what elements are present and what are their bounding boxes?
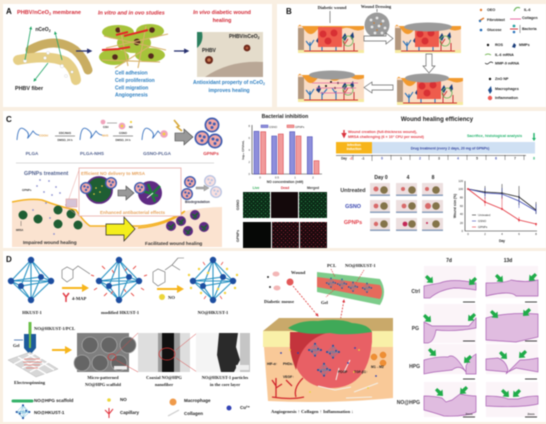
histology grid: 7d xyxy=(446,258,452,264)
line chart: wound size over days: 6 xyxy=(518,232,520,236)
photo: wound on skin: PHBV xyxy=(202,48,217,54)
wound photographs by day: 4 xyxy=(407,175,410,181)
bar chart: bacterial inhibition: 0 xyxy=(259,176,261,180)
fluorescence microscopy grid: GSNO xyxy=(236,200,240,210)
label HKUST-1: HKUST-1 xyxy=(22,310,42,315)
line chart: wound size over days: 80 xyxy=(460,196,463,200)
photo: wound on skin: 2 xyxy=(258,36,260,40)
line chart: wound size over days xyxy=(453,179,537,243)
tissue block with wound bed: PDGF xyxy=(338,370,347,374)
electrospinning setup: NO@HKUST-1/PCL xyxy=(34,326,75,331)
micrograph: core layer particles: NO@HKUST-1 particles xyxy=(202,375,248,380)
inset: NO delivery to MRSA xyxy=(66,168,181,216)
tissue block with wound bed: HIF-α↑ xyxy=(267,362,278,366)
panel letter D: D xyxy=(6,255,12,264)
histology grid: PG xyxy=(412,326,419,332)
illustration: PHBV fibers xyxy=(18,43,88,80)
coaxial fiber cutaway: NO@HKUST-1 xyxy=(345,263,376,268)
arrow 2 xyxy=(174,50,188,52)
legend: components: Fibroblast xyxy=(487,18,506,22)
histology grid: 13d xyxy=(504,258,512,264)
synthesis scheme: GSNO-PLGA xyxy=(143,151,172,156)
wound bed schematic: Facilitated wound healing xyxy=(145,241,202,246)
micrograph: micro-patterned scaffold: Micro-patterned xyxy=(87,375,119,380)
micrograph: coaxial nanofiber: Coaxial NO@HPG xyxy=(146,375,182,380)
tissue block with wound bed xyxy=(263,318,393,402)
panel letter A: A xyxy=(6,7,12,16)
coaxial fiber cutaway: PCL xyxy=(327,263,336,268)
label nCeO2: 2 xyxy=(49,29,51,33)
coaxial fiber cutaway xyxy=(317,263,384,322)
wound photographs by day: 8 xyxy=(432,175,435,181)
skin diagram 3: healing xyxy=(397,74,463,105)
fluorescence microscopy grid: Merged xyxy=(307,186,319,190)
hollow arrow left xyxy=(364,82,393,93)
line chart: wound size over days: 0 xyxy=(461,229,463,233)
mouse wound schematic xyxy=(264,270,318,316)
wound bed schematic: MRSA xyxy=(16,229,24,232)
wound bed schematic: Impaired wound healing xyxy=(23,240,77,245)
fluorescence microscopy grid: Live xyxy=(253,186,260,190)
panel A: PHBV/nCeO2 membrane xyxy=(3,4,272,107)
synthesis scheme: PLGA xyxy=(26,151,39,156)
line chart: wound size over days: 8 xyxy=(535,232,537,236)
arrow 1 xyxy=(76,50,91,52)
legend: scaffold components: Macrophage xyxy=(184,398,211,403)
synthesis scheme: GPNPs xyxy=(203,151,219,156)
legend: scaffold components: NO@HPG scaffold xyxy=(34,398,74,403)
micrograph: coaxial nanofiber xyxy=(116,333,190,387)
timeline: wound healing efficiency: Sacrifice, histological analysis xyxy=(467,134,522,138)
text: cell outcomes: Cell proliferation xyxy=(115,78,155,84)
synthesis scheme: DMSO, 24 h xyxy=(58,138,73,142)
bar chart: bacterial inhibition: 8 xyxy=(249,124,251,128)
bar chart: bacterial inhibition: 2 xyxy=(249,160,251,164)
tissue block with wound bed: TGF-β1↑ xyxy=(354,370,368,374)
synthesis scheme: NO xyxy=(129,126,133,129)
bar chart: bacterial inhibition: 0.5 xyxy=(275,176,279,180)
timeline: wound healing efficiency: Infection xyxy=(347,143,361,147)
panel letter B: B xyxy=(286,7,292,16)
timeline: wound healing efficiency: induction xyxy=(347,147,361,151)
yellow transition arrow xyxy=(106,217,135,241)
bar chart: bacterial inhibition: Bacterial inhibition xyxy=(262,114,308,120)
timeline: wound healing efficiency: Day xyxy=(341,156,347,160)
histology grid: HPG xyxy=(409,364,420,370)
timeline: wound healing efficiency: Wound healing efficiency xyxy=(401,117,474,123)
synthesis scheme: GSNO xyxy=(119,131,127,135)
wound photographs by day xyxy=(340,175,443,231)
micrograph: core layer particles xyxy=(176,333,250,387)
label diabetic wound: Diabetic wound xyxy=(318,5,347,10)
timeline: wound healing efficiency: 0 xyxy=(381,156,383,160)
fluorescence microscopy grid: Dead xyxy=(281,186,289,190)
photo: wound on skin xyxy=(197,32,263,77)
heading: membrane: PHBV/nCeO xyxy=(17,10,49,16)
legend: components: Bacteria xyxy=(522,27,538,31)
micrograph: micro-patterned scaffold: NO@HPG scaffold xyxy=(85,382,122,387)
electrospinning setup: Electrospinning xyxy=(14,380,46,385)
line chart: wound size over days: 60 xyxy=(460,204,463,208)
wound bed schematic: GPNPs xyxy=(22,188,32,192)
legend: components: Inflammation xyxy=(495,96,519,100)
bar chart: bacterial inhibition: 1 xyxy=(294,176,296,180)
panel letter C: C xyxy=(6,115,12,124)
legend: scaffold components: Collagen xyxy=(184,411,203,416)
legend: components: IL-6 mRNA xyxy=(495,53,514,57)
reagent 4-MAP xyxy=(62,266,90,302)
histology grid xyxy=(397,258,538,417)
MOF: HKUST-1 xyxy=(8,257,54,303)
heading: membrane: 2 xyxy=(49,12,51,16)
synthesis scheme: GSH xyxy=(103,126,109,129)
timeline: wound healing efficiency: -2 xyxy=(350,156,353,160)
histology grid: NO@HPG xyxy=(397,400,420,406)
fluorescence microscopy grid: GPNPs xyxy=(236,230,240,242)
line chart: wound size over days: Day xyxy=(499,239,505,243)
line chart: wound size over days: 2 xyxy=(484,232,486,236)
heading: in vivo: In vivo diabetic wound xyxy=(193,10,251,16)
timeline: wound healing efficiency xyxy=(336,117,536,161)
photo: wound on skin: PHBV/nCeO xyxy=(229,34,258,40)
legend: components: ROS xyxy=(495,43,504,47)
bar chart: bacterial inhibition xyxy=(241,114,322,184)
wound photographs by day: Day 0 xyxy=(374,175,388,181)
bar chart: bacterial inhibition: 0 xyxy=(249,172,251,176)
timeline: wound healing efficiency: -1 xyxy=(362,156,365,160)
synthesis scheme: PLGA-NHS xyxy=(80,151,104,156)
timeline: wound healing efficiency: 5 xyxy=(476,156,478,160)
label PHBV fiber: PHBV fiber xyxy=(15,86,44,92)
histology grid: Ctrl xyxy=(411,289,421,295)
legend: components: MMP-9 mRNA xyxy=(495,62,520,66)
bar chart: bacterial inhibition: log₁₀ CFU/mL xyxy=(241,140,245,160)
coaxial fiber cutaway: Gel xyxy=(321,300,329,305)
legend: scaffold components: Capillary xyxy=(120,410,140,415)
wound bed schematic xyxy=(12,179,222,247)
mouse wound schematic: Diabetic mouse xyxy=(264,299,294,304)
tissue block with wound bed: M1→M2 xyxy=(371,365,384,369)
electrospinning setup: Gel xyxy=(13,343,20,348)
legend: components: IL-6 xyxy=(524,8,531,12)
synthesis scheme: DMSO, 24 h xyxy=(116,138,131,142)
electrospinning setup xyxy=(8,322,75,385)
inset: NO delivery to MRSA: Enhanced antibacterial effects xyxy=(100,210,166,215)
wound photographs by day: Untreated xyxy=(340,188,366,194)
biodegradation: Biodegradation xyxy=(185,200,210,204)
heading: in vivo: healing xyxy=(213,18,231,24)
line chart: wound size over days: GSNO xyxy=(478,219,487,223)
timeline: wound healing efficiency: Wound creation (full-thickness wound), xyxy=(348,130,417,134)
timeline: wound healing efficiency: MRSA challenging (6 × 10⁷ CFU per wound) xyxy=(348,135,425,139)
text: cell outcomes: Angiogenesis xyxy=(115,93,148,99)
timeline: wound healing efficiency: 4 xyxy=(457,156,459,160)
skin diagram 4: healed xyxy=(298,70,364,102)
bar chart: bacterial inhibition: 6 xyxy=(249,136,251,140)
label modified HKUST-1: modified HKUST-1 xyxy=(101,310,140,315)
bar chart: bacterial inhibition: GPNPs xyxy=(295,125,305,129)
tissue block with wound bed: VEGF↑ xyxy=(283,375,294,379)
legend: components xyxy=(479,7,538,100)
timeline: wound healing efficiency: Drug treatment (every 2 days, 20 mg of GPNPs) xyxy=(411,146,489,150)
panel C: GPNPs for MRSA wounds xyxy=(3,111,546,248)
bar chart: bacterial inhibition: 2 xyxy=(312,176,314,180)
micrograph: core layer particles: in the core layer xyxy=(210,382,240,387)
legend: components: Macrophages xyxy=(495,87,519,91)
reagent 4-MAP: 4-MAP xyxy=(72,296,86,301)
text: antioxidant conclusion: Antioxidant property of nCeO xyxy=(193,80,263,86)
timeline: wound healing efficiency: 2 xyxy=(419,156,421,160)
panel D: NO@HKUST-1 scaffold xyxy=(3,251,546,422)
timeline: wound healing efficiency: 1 xyxy=(400,156,402,160)
line chart: wound size over days: 4 xyxy=(501,232,503,236)
histology grid: 2mm xyxy=(527,412,535,416)
panel B: wound dressing xyxy=(277,4,546,107)
synthesis scheme xyxy=(17,118,222,156)
legend: scaffold components: Cu²⁺ xyxy=(240,405,250,410)
legend: components: Collagen xyxy=(522,16,538,20)
micrograph: coaxial nanofiber: nanofiber xyxy=(155,382,173,387)
heading: in vitro: In vitro and in ovo studies xyxy=(98,10,165,16)
MOF: modified HKUST-1 xyxy=(91,257,147,303)
bar chart: bacterial inhibition: NO concentration (mM) xyxy=(267,180,303,184)
text: cell outcomes: Cell migration xyxy=(115,85,148,91)
timeline: wound healing efficiency: 6 xyxy=(495,156,497,160)
synthesis scheme: COOH xyxy=(39,134,48,138)
heading: membrane: membrane xyxy=(51,10,81,16)
line chart: wound size over days: Untreated xyxy=(478,213,491,217)
wound photographs by day: GPNPs xyxy=(344,220,362,226)
legend: scaffold components xyxy=(13,397,250,419)
line chart: wound size over days: 0 xyxy=(467,232,469,236)
mouse wound schematic: Wound xyxy=(291,270,306,275)
line chart: wound size over days: 120 xyxy=(458,179,463,183)
line chart: wound size over days: 100 xyxy=(458,187,463,191)
green pointer arrows xyxy=(25,27,62,81)
line chart: wound size over days: 20 xyxy=(460,221,463,225)
text: antioxidant conclusion: 2 xyxy=(263,82,265,86)
legend: components: OEO xyxy=(487,8,495,12)
outcomes line: Angiogenesis ↑ Collagen ↑ Inflammation ↓ xyxy=(271,409,354,414)
histology grid: 2mm xyxy=(465,412,473,416)
illustration: cells on fibers xyxy=(99,24,168,68)
text: antioxidant conclusion: improves healing xyxy=(208,88,250,94)
arrow to micrographs xyxy=(52,346,72,354)
skin diagram 2: dressing applied xyxy=(395,22,461,53)
label NO@HKUST-1: NO@HKUST-1 xyxy=(198,310,229,315)
inset: NO delivery to MRSA: Efficient NO delivery to MRSA xyxy=(81,171,146,176)
hollow arrow right xyxy=(364,33,393,44)
bar chart: bacterial inhibition: 4 xyxy=(249,148,251,152)
line chart: wound size over days: GPNPs xyxy=(478,225,488,229)
line chart: wound size over days: 40 xyxy=(460,212,463,216)
text: cell outcomes: Cell adhesion xyxy=(115,70,148,76)
legend: scaffold components: NO@HKUST-1 xyxy=(34,410,65,415)
dressing disc xyxy=(364,12,390,38)
hollow arrow down xyxy=(423,54,435,73)
biodegradation xyxy=(181,175,222,204)
wound photographs by day: GSNO xyxy=(345,204,361,210)
synthesis scheme: EDC/NHS xyxy=(59,131,71,135)
skin diagram 1: untreated wound xyxy=(298,25,364,53)
reagent NO xyxy=(153,258,184,300)
legend: scaffold components: NO xyxy=(120,397,127,402)
timeline: wound healing efficiency: 7 xyxy=(514,156,516,160)
line chart: wound size over days: Wound size (%) xyxy=(453,194,457,218)
timeline: wound healing efficiency: 8 xyxy=(533,156,535,160)
tissue block with wound bed: PHDs↓ xyxy=(283,362,294,366)
legend: components: MMPs xyxy=(519,43,530,47)
synthesis scheme: NHS xyxy=(102,134,108,138)
MOF: NO@HKUST-1 xyxy=(188,257,238,303)
reagent NO: NO xyxy=(168,295,175,300)
legend: components: Glucose xyxy=(487,28,502,32)
fluorescence microscopy grid xyxy=(236,186,327,248)
label wound dressing: Wound Dressing xyxy=(361,4,392,9)
heading: GPNPs treatment: GPNPs treatment xyxy=(24,171,69,177)
bar chart: bacterial inhibition: GSNO xyxy=(269,125,278,129)
label nCeO2: nCeO xyxy=(35,27,49,33)
legend: components: ZnO NP xyxy=(495,77,509,81)
timeline: wound healing efficiency: 3 xyxy=(438,156,440,160)
micrograph: micro-patterned scaffold xyxy=(74,333,136,387)
